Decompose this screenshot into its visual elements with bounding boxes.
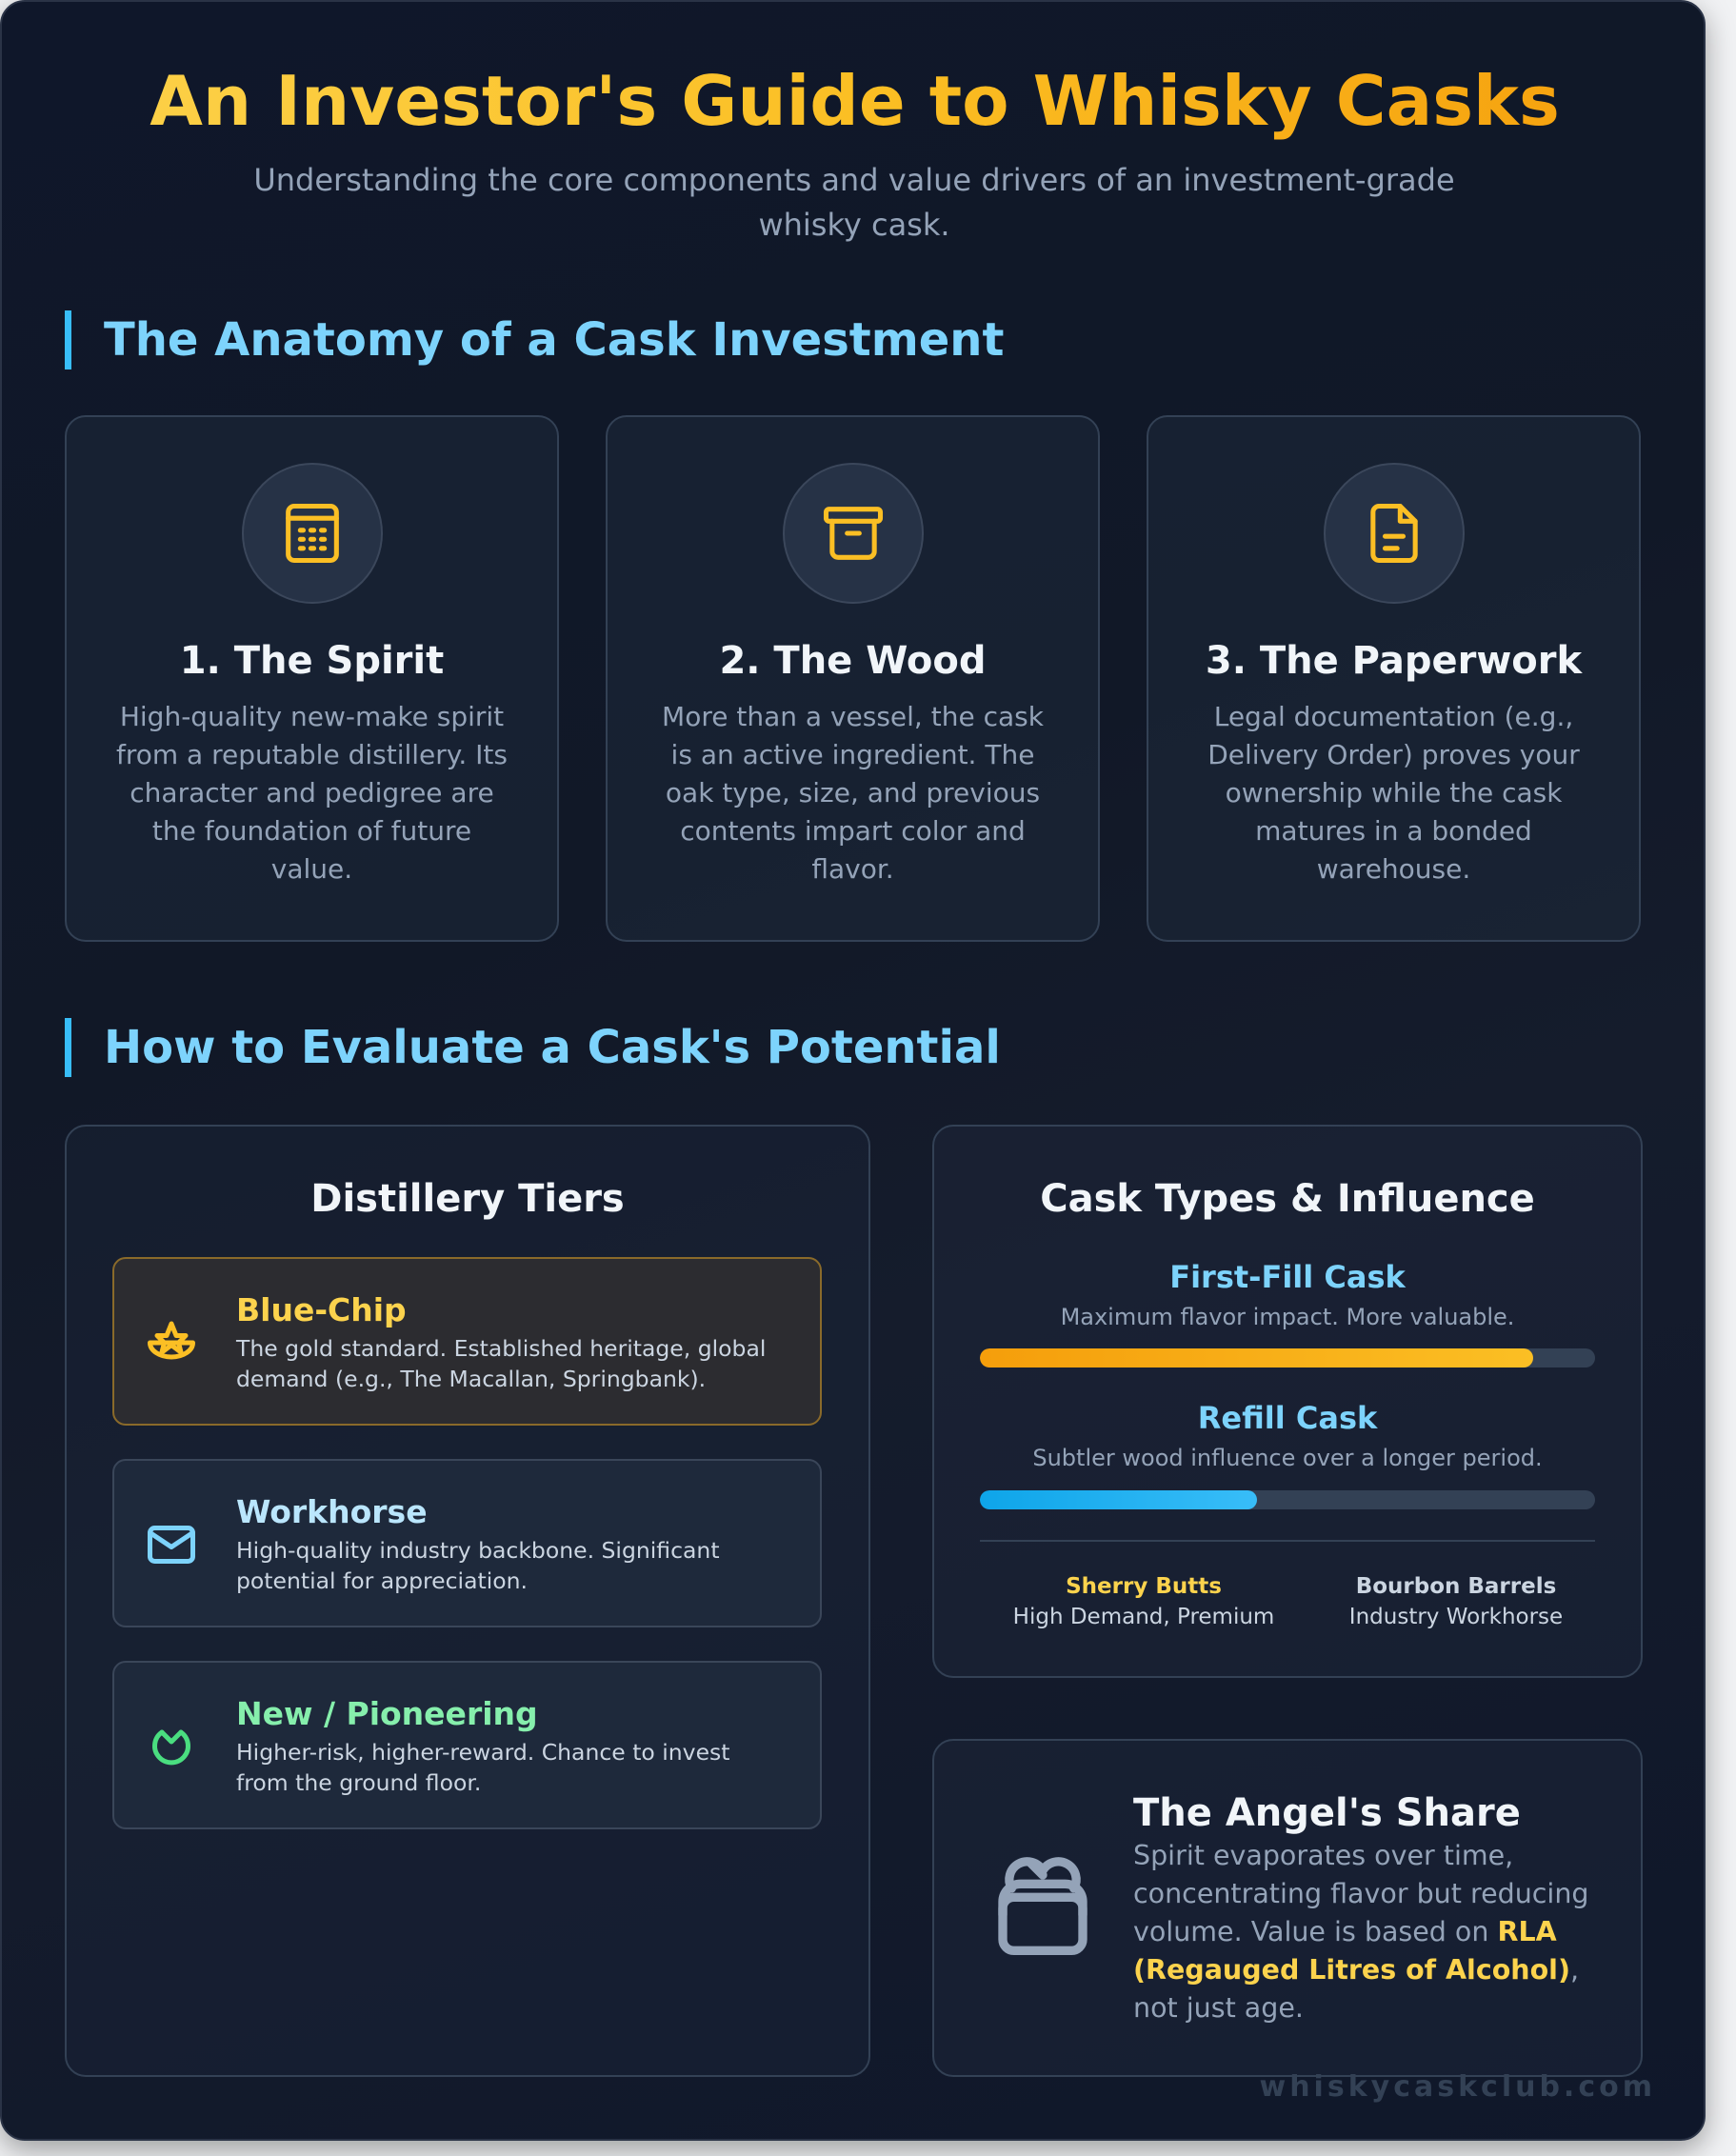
icon: document xyxy=(1324,463,1465,604)
panel: the wood xyxy=(606,415,1100,942)
bar: refill xyxy=(980,1490,1595,1509)
card text: Legal documentation (e.g., Delivery Order) proves your ownership while the cask matures in a bonded warehouse. xyxy=(1207,701,1580,885)
panel title: Cask Types & Influence xyxy=(1040,1177,1535,1221)
card text: High-quality new-make spirit from a reputable distillery. Its character and pedigree are the foundation of future value. xyxy=(116,701,508,885)
title: The Angel's Share xyxy=(1133,1791,1521,1835)
bourbon barrels xyxy=(1349,1574,1563,1629)
panel: distillery tiers xyxy=(65,1125,870,2077)
bourbon barrels: Bourbon Barrels xyxy=(1356,1574,1556,1599)
refill desc: Subtler wood influence over a longer period. xyxy=(1032,1445,1543,1471)
tier title: Workhorse xyxy=(236,1493,428,1530)
bourbon barrels: Industry Workhorse xyxy=(1349,1605,1563,1629)
panel: the paperwork xyxy=(1147,415,1641,942)
panel: the spirit xyxy=(65,415,559,942)
subtitle: Understanding the core components and value drivers of an investment-grade whisky cask. xyxy=(253,162,1455,243)
refill label: Refill Cask xyxy=(1198,1400,1377,1436)
heading: evaluate: How to Evaluate a Cask's Potential xyxy=(104,1021,1001,1074)
bar: first-fill xyxy=(980,1348,1595,1367)
card title: 2. The Wood xyxy=(719,639,987,683)
panel: cask types xyxy=(932,1125,1643,1678)
card title: 1. The Spirit xyxy=(180,639,444,683)
card text: More than a vessel, the cask is an active ingredient. The oak type, size, and previous contents impart color and flavor. xyxy=(662,701,1044,885)
tier title: New / Pioneering xyxy=(236,1695,538,1732)
icon: box xyxy=(783,463,924,604)
sherry butts: High Demand, Premium xyxy=(1013,1605,1274,1629)
tier text: Higher-risk, higher-reward. Chance to invest from the ground floor. xyxy=(236,1739,730,1796)
first-fill label: First-Fill Cask xyxy=(1169,1259,1406,1295)
tier text: The gold standard. Established heritage, global demand (e.g., The Macallan, Springbank). xyxy=(236,1335,766,1392)
tier: blue-chip xyxy=(112,1257,822,1426)
icon: calculator xyxy=(242,463,383,604)
footer: whiskycaskclub.com xyxy=(1259,2070,1656,2104)
icon: envelope xyxy=(148,1526,195,1564)
icon: crown xyxy=(148,1322,195,1360)
first-fill desc: Maximum flavor impact. More valuable. xyxy=(1061,1304,1514,1330)
card title: 3. The Paperwork xyxy=(1206,639,1582,683)
tier text: High-quality industry backbone. Significant potential for appreciation. xyxy=(236,1537,720,1594)
sherry butts xyxy=(1013,1574,1274,1629)
icon: cask with vapor xyxy=(998,1857,1087,1955)
panel title: Distillery Tiers xyxy=(310,1177,625,1221)
tier title: Blue-Chip xyxy=(236,1291,407,1328)
sherry butts: Sherry Butts xyxy=(1066,1574,1222,1599)
title: An Investor's Guide to Whisky Casks xyxy=(150,61,1560,141)
tier: workhorse xyxy=(112,1459,822,1627)
tier: new / pioneering xyxy=(112,1661,822,1829)
icon: sprout xyxy=(152,1729,190,1766)
text: Spirit evaporates over time, concentrating flavor but reducing volume. Value is based on RLA (Regauged Litres of Alcohol), not just age. xyxy=(1133,1840,1589,2024)
heading: anatomy: The Anatomy of a Cask Investment xyxy=(104,313,1004,367)
panel: angel's share xyxy=(932,1739,1643,2077)
